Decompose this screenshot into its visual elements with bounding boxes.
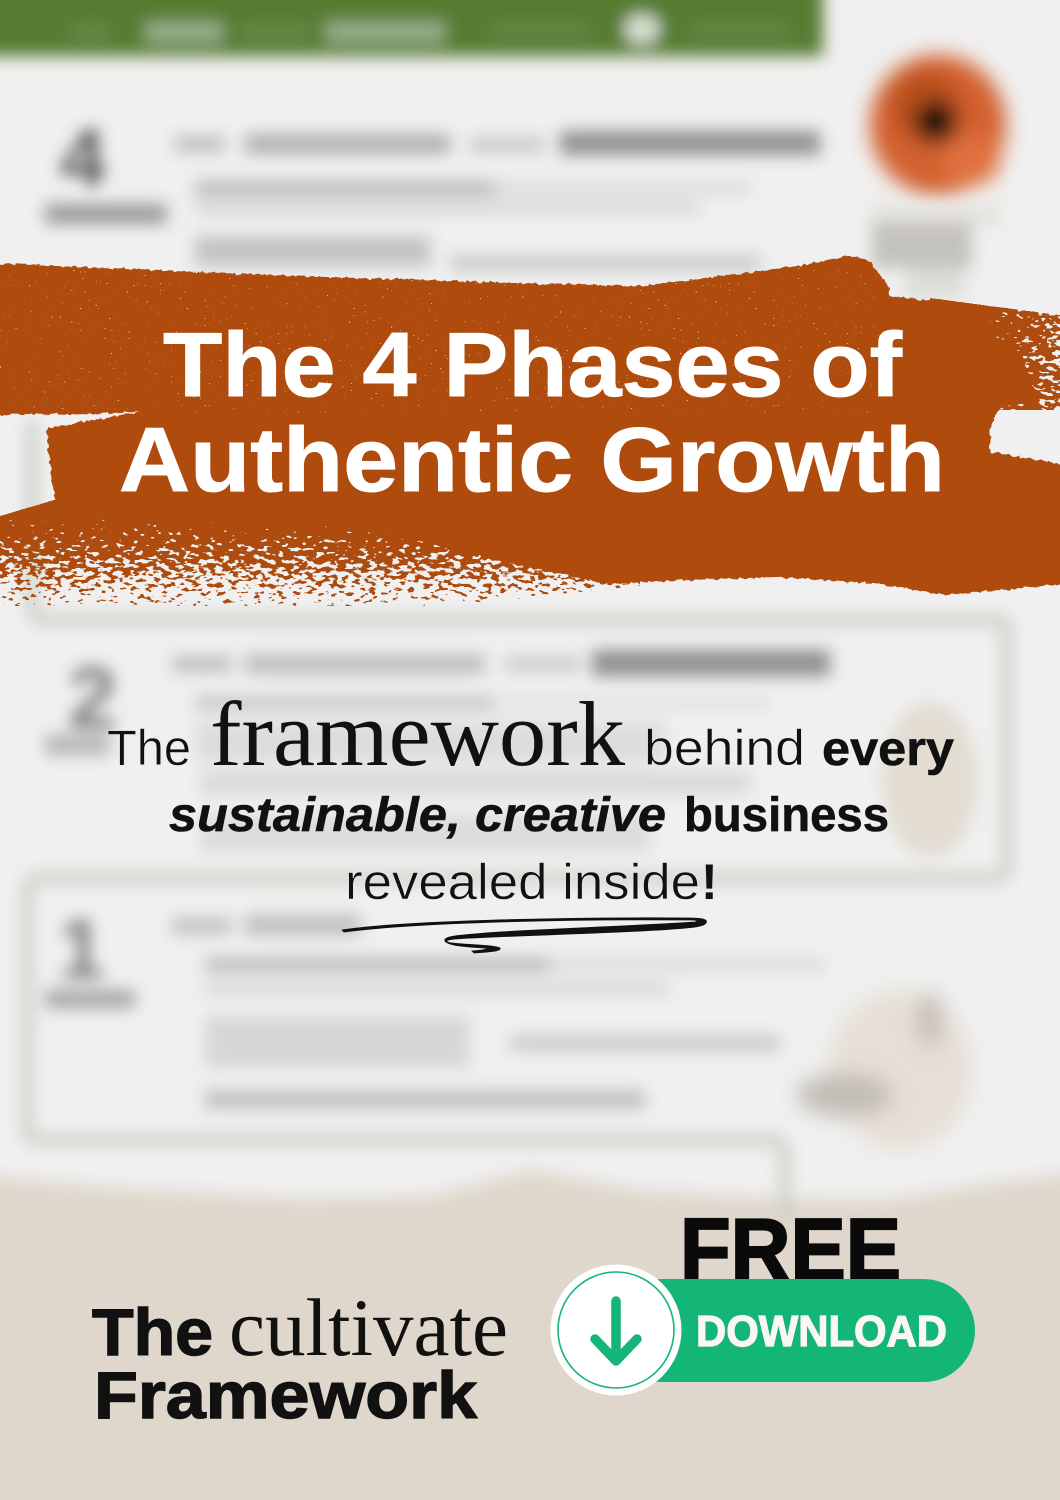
snake path connecting phases [27,420,1007,1228]
subtitle: The [107,720,191,776]
phase 4 preview: 4 [60,113,106,204]
footer beige wave [0,1168,1060,1500]
subtitle: every [822,723,954,776]
title [119,315,945,511]
underline swoosh [342,918,706,953]
icon: download arrow [550,1264,682,1396]
path line over footer [781,1165,789,1225]
subtitle: ! [701,854,718,910]
flower caption [870,205,1000,298]
phase 4 preview [45,113,820,270]
subtitle: business [684,789,889,842]
subtitle: revealed inside [345,854,700,910]
footer title: The cultivate Framework: The [92,1295,213,1369]
title: The 4 Phases of [163,315,903,416]
phase 2 preview: 2 [68,648,117,747]
title: Authentic Growth [119,410,945,511]
green header bar [0,0,823,56]
subtitle [107,683,954,910]
phase 1 preview: 1 [58,902,105,996]
footer title: The cultivate Framework [92,1282,508,1432]
button label: DOWNLOAD [696,1307,947,1356]
brush spatter right [930,298,1060,410]
brush stroke banner [0,256,1060,606]
phase 2 image [882,702,978,858]
footer title: The cultivate Framework: Framework [94,1358,477,1432]
subtitle: behind [644,720,805,776]
download button [550,1264,975,1396]
phase 1 image [797,990,972,1150]
brush specks [0,268,880,413]
footer title: The cultivate Framework: cultivate [229,1282,508,1373]
brush spatter lower left [0,500,640,606]
phase 2 preview [45,648,830,853]
brush core [0,256,1060,595]
button pill [610,1279,975,1382]
free label: FREE [680,1200,901,1299]
poppy flower [870,55,1006,195]
subtitle: sustainable, creative [169,789,666,842]
subtitle: framework [210,683,625,785]
phase 1 preview [45,902,825,1108]
